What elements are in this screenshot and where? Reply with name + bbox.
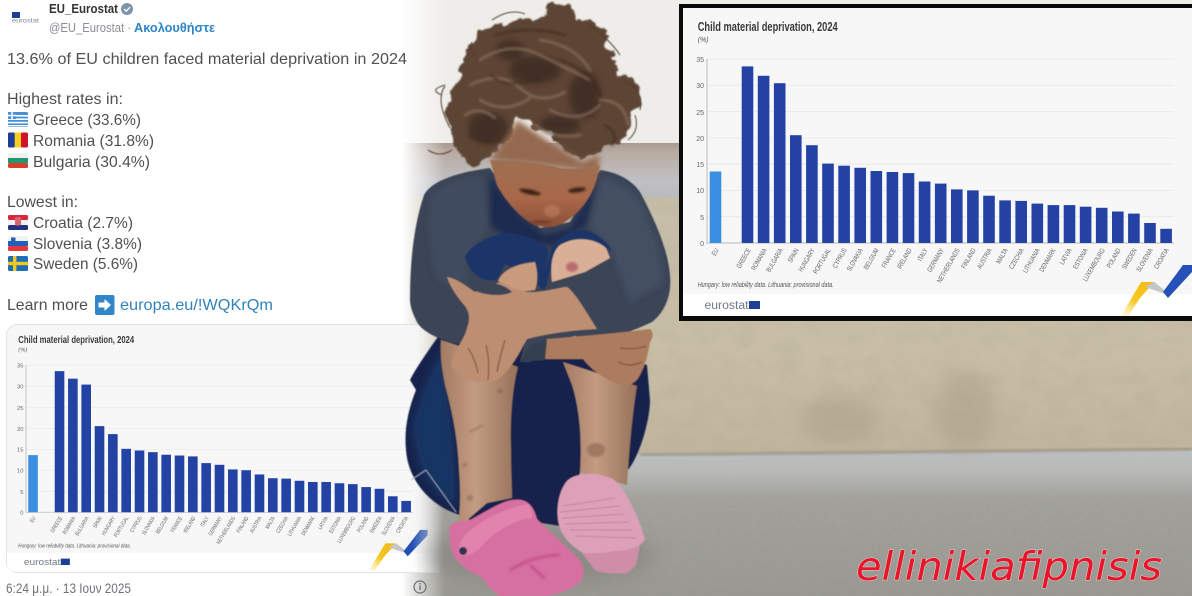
unit label: (%) [698, 37, 709, 44]
watermark: ellinikiafipnisis [856, 545, 1162, 590]
country labels: IRELAND [182, 515, 198, 534]
country labels: EU [710, 247, 721, 257]
gridlines and y axis: 30 [17, 384, 24, 390]
sweater [410, 168, 670, 362]
learn more link: europa.eu/!WQKrQm [120, 297, 273, 314]
forehead [490, 120, 600, 172]
gridlines and y axis [17, 364, 413, 517]
clog marks [510, 555, 560, 578]
country labels: ITALY [916, 247, 930, 263]
tweet header: @EU_Eurostat · [49, 20, 131, 35]
country labels: SLOVENIA [1135, 247, 1155, 274]
photo background: wall and ground [400, 0, 1192, 596]
right leg [563, 362, 637, 485]
gridlines and y axis: 10 [17, 468, 24, 474]
lowest rates list [7, 194, 142, 273]
country labels: LITHUANIA [1022, 247, 1042, 275]
gridlines and y axis: 35 [17, 364, 24, 370]
hair base [446, 2, 641, 164]
swoosh graphic [1121, 265, 1192, 316]
country labels: LATVIA [317, 515, 330, 531]
country labels: SWEDEN [369, 515, 384, 535]
knee fabric fold [540, 230, 612, 290]
clog rivet [459, 547, 467, 555]
flag: Slovenia [8, 236, 28, 251]
country labels: PORTUGAL [113, 515, 131, 539]
panel: enlarged chart [679, 4, 1192, 321]
gridlines and y axis: 20 [696, 136, 704, 143]
chart title: Child material deprivation, 2024 [698, 19, 838, 34]
face [490, 160, 600, 227]
clog strap [458, 504, 532, 556]
country bars [742, 66, 1172, 243]
left leg [441, 340, 518, 528]
leg marks [463, 388, 605, 501]
shorts [405, 334, 650, 526]
gridlines and y axis: 15 [696, 162, 704, 169]
country labels: SPAIN [787, 247, 801, 264]
icon: arrow tile [95, 295, 114, 315]
centre sleeve [520, 340, 547, 362]
country labels: FRANCE [170, 515, 185, 534]
hair curls [465, 30, 628, 145]
country labels: CYPRUS [129, 515, 144, 534]
gridlines and y axis: 30 [696, 83, 704, 90]
country labels: EU [29, 515, 38, 524]
country labels: SLOVENIA [381, 515, 398, 537]
chart title: Child material deprivation, 2024 [18, 334, 134, 346]
country labels: POLAND [356, 515, 371, 534]
country labels: ESTONIA [328, 515, 344, 535]
gridlines and y axis: 0 [700, 241, 704, 248]
gridlines and y axis: 20 [17, 427, 24, 433]
gridlines and y axis: 0 [20, 511, 24, 517]
country labels: ROMANIA [750, 247, 769, 272]
fingers [468, 340, 646, 380]
country labels: SLOVAKIA [845, 247, 865, 273]
country labels: LITHUANIA [287, 515, 304, 538]
country labels: MALTA [995, 247, 1010, 265]
rear hand [544, 329, 653, 385]
tweet headline: 13.6% of EU children faced material deprivation in 2024 [7, 51, 407, 68]
highest rates list: Romania (31.8%) [33, 133, 154, 150]
clog heel lower [582, 545, 640, 574]
chart footnote: Hungary: low reliability data. Lithuania: provisional data. [18, 543, 131, 549]
learn more link: Learn more [7, 297, 88, 314]
tweet header: EU_Eurostat [49, 1, 119, 16]
country labels: SPAIN [92, 515, 104, 529]
chart: child material deprivation [696, 19, 1192, 316]
panel: tweet chart card [6, 324, 456, 572]
highest rates list: Bulgaria (30.4%) [33, 154, 150, 171]
tweet header: Ακολουθήστε [134, 20, 215, 35]
eurostat logo: eurostat [704, 300, 749, 312]
photo: child sitting [405, 2, 670, 596]
country labels: CROATIA [1153, 247, 1171, 271]
country labels: FRANCE [880, 247, 898, 270]
swoosh graphic [369, 530, 428, 571]
chart: child material deprivation (tweet copy) [17, 334, 428, 571]
lowest rates list: Croatia (2.7%) [33, 215, 133, 232]
country labels: GREECE [735, 247, 753, 270]
country labels: NETHERLANDS [216, 515, 238, 546]
gridlines and y axis: 35 [696, 57, 704, 64]
highest rates list [7, 91, 154, 171]
country labels: CYPRUS [831, 247, 849, 270]
country labels: MALTA [264, 515, 277, 530]
country labels: ITALY [199, 515, 211, 528]
country labels: DENMARK [300, 515, 317, 537]
country labels: HUNGARY [101, 515, 118, 537]
white fade between tweet and photo [400, 0, 446, 596]
unit label: (%) [18, 348, 27, 354]
highest rates list: Greece (33.6%) [33, 112, 141, 129]
tweet timestamp: 6:24 μ.μ. · 13 Ιουν 2025 [6, 581, 131, 596]
gridlines and y axis [696, 57, 1174, 248]
country labels: FINLAND [236, 515, 251, 534]
gridlines and y axis: 5 [700, 215, 704, 222]
country labels: ROMANIA [62, 515, 78, 536]
country labels: CROATIA [395, 515, 411, 535]
gridlines and y axis: 15 [17, 448, 24, 453]
country labels: FINLAND [960, 247, 978, 270]
shorts highlights [412, 352, 456, 505]
country labels: PORTUGAL [812, 247, 833, 276]
EU bar [28, 455, 38, 512]
highest rates list: Highest rates in: [7, 91, 123, 108]
flag: Romania [8, 132, 28, 148]
country labels [710, 246, 1171, 284]
country labels: LATVIA [1058, 246, 1074, 266]
country labels: SLOVAKIA [141, 515, 157, 536]
stray curls [428, 12, 641, 154]
EU bar [710, 172, 721, 243]
country labels: HUNGARY [797, 247, 817, 273]
country labels: POLAND [1105, 247, 1123, 270]
clog sole [557, 474, 645, 553]
flag: Bulgaria [8, 153, 28, 168]
gridlines and y axis: 25 [17, 406, 24, 412]
scrape on knee [566, 262, 578, 272]
learn more link [7, 295, 273, 315]
left inner knee [498, 262, 537, 292]
country labels: BELGIUM [155, 516, 170, 535]
country labels: GERMANY [207, 515, 225, 537]
country labels: SWEDEN [1121, 247, 1139, 271]
panel: tweet [6, 1, 407, 596]
country labels: ESTONIA [1072, 247, 1090, 271]
eurostat logo [705, 301, 760, 309]
pink clog [449, 500, 584, 596]
right knee [551, 239, 610, 282]
country labels: BULGARIA [74, 515, 91, 537]
forearm and front hand [447, 277, 597, 382]
flag: Greece [8, 112, 28, 127]
country labels: BELGIUM [862, 247, 881, 271]
left knee fabric [465, 233, 549, 287]
lowest rates list: Lowest in: [7, 194, 78, 211]
country labels: LUXEMBOURG [1082, 247, 1107, 283]
eurostat logo: eurostat [24, 557, 61, 567]
country labels: GREECE [49, 515, 65, 534]
country labels: LUXEMBOURG [336, 516, 358, 544]
lowest rates list: Slovenia (3.8%) [33, 236, 142, 253]
sweater shading [430, 175, 663, 302]
country labels [29, 515, 411, 546]
flag: Sweden [8, 256, 28, 271]
gridlines and y axis: 10 [696, 188, 704, 195]
chart footnote: Hungary: low reliability data. Lithuania: provisional data. [698, 282, 834, 289]
tweet header: eurostat [12, 18, 39, 24]
country labels: DENMARK [1038, 247, 1058, 274]
gridlines and y axis: 5 [20, 490, 24, 496]
lowest rates list: Sweden (5.6%) [33, 256, 138, 273]
flag: Croatia [8, 215, 28, 230]
tweet header [12, 1, 215, 35]
nose highlight [544, 205, 560, 217]
country labels: BULGARIA [765, 247, 785, 274]
sole ridges [560, 498, 636, 538]
country labels: NETHERLANDS [936, 247, 962, 284]
left sleeve cuff [470, 282, 512, 295]
country labels: AUSTRIA [976, 247, 994, 271]
country labels: AUSTRIA [249, 515, 264, 534]
shorts seam [411, 470, 456, 512]
hair shadows [468, 40, 601, 144]
shadow on ground [425, 525, 655, 585]
country labels: GERMANY [926, 247, 946, 274]
country labels: IRELAND [896, 247, 914, 271]
icon: info [414, 581, 426, 593]
country labels: CZECHIA [1008, 246, 1026, 271]
country labels: CZECHIA [275, 515, 291, 535]
gridlines and y axis: 25 [696, 110, 704, 117]
country bars [55, 371, 411, 512]
eyes and mouth [519, 186, 586, 224]
eurostat logo [24, 558, 70, 565]
